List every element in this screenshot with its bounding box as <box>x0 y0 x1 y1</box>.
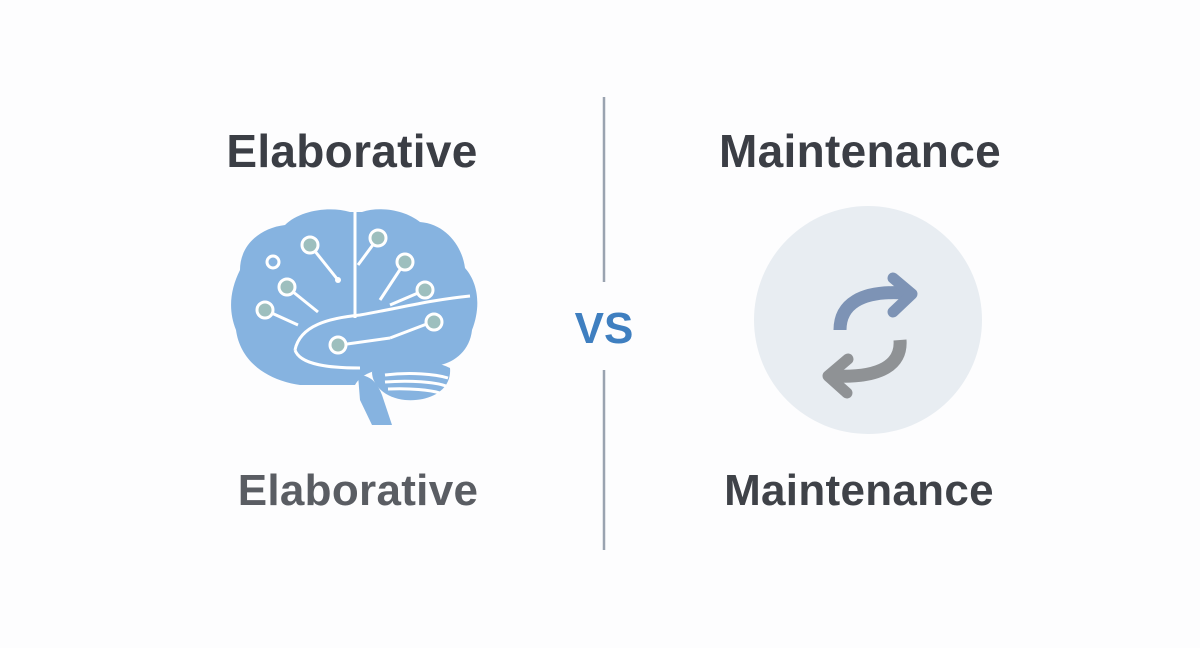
vs label: VS <box>575 304 633 353</box>
icon: refresh circle <box>754 206 982 434</box>
title: Elaborative: Elaborative <box>226 125 478 177</box>
title: Maintenance: Maintenance <box>719 125 1001 177</box>
label: Elaborative bottom: Elaborative <box>238 466 478 515</box>
label: Maintenance bottom: Maintenance <box>724 466 994 515</box>
icon: brain <box>231 209 477 425</box>
